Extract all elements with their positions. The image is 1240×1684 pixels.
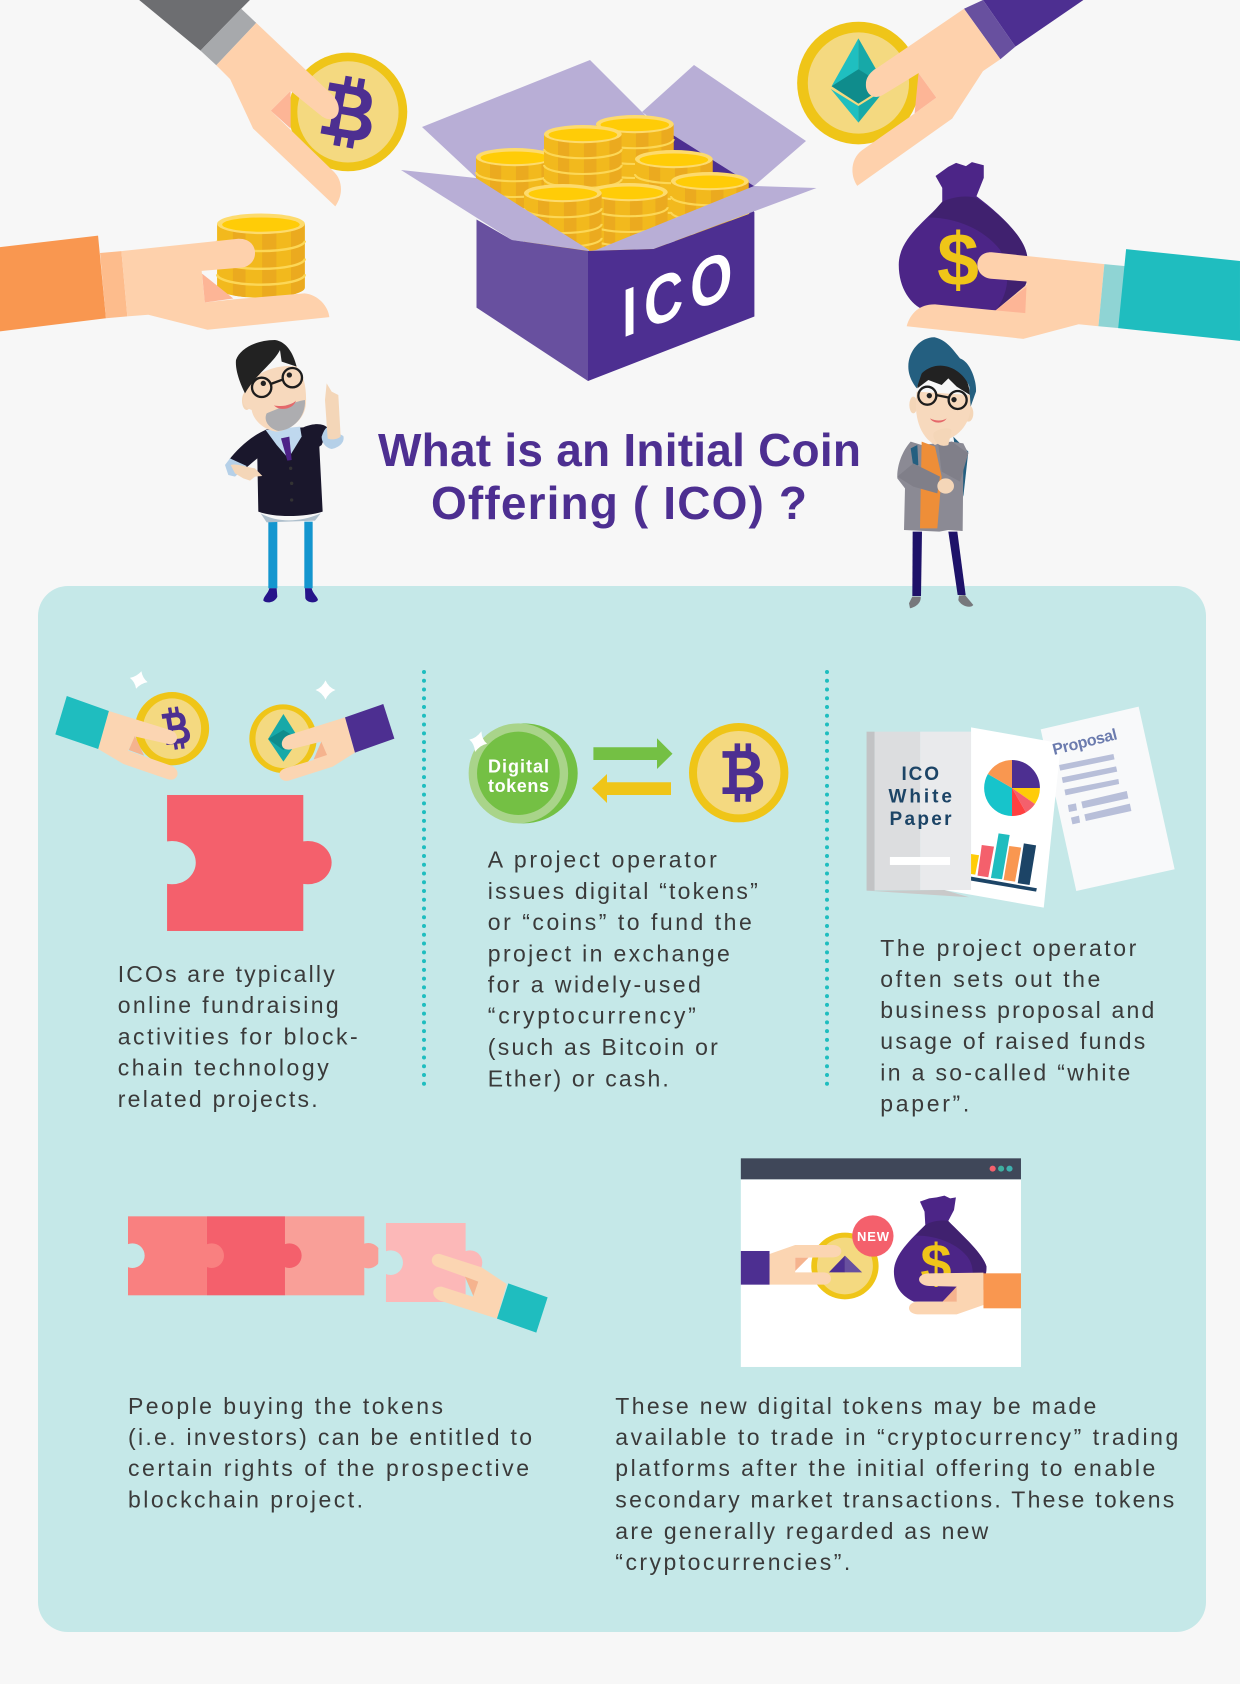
text: trading platforms paragraph: platforms after the initial offering to enable xyxy=(615,1455,1155,1481)
icon: trading platform window xyxy=(741,1158,1021,1367)
icon: white paper, charts and proposal: Paper xyxy=(890,809,952,830)
icon: digital token exchanged with bitcoin: tokens xyxy=(488,776,549,796)
text: column 3: business proposal and xyxy=(880,997,1154,1023)
icon: ICO box full of coins xyxy=(401,60,816,381)
text: column 3 xyxy=(880,935,1154,1117)
text: column 3: The project operator xyxy=(880,935,1137,961)
divider: left dotted line xyxy=(422,672,426,1085)
text: trading platforms paragraph: “cryptocurrencies”. xyxy=(615,1549,850,1575)
text: column 3: often sets out the xyxy=(880,966,1100,992)
icon: trading platform window: NEW xyxy=(857,1229,890,1244)
icon: hand holding coin stack xyxy=(0,214,329,331)
text: column 1 xyxy=(118,961,358,1112)
text: trading platforms paragraph: available to trade in “cryptocurrency” trading xyxy=(615,1424,1178,1450)
icon: trading platform window: $ xyxy=(920,1232,952,1295)
text: trading platforms paragraph: are generally regarded as new xyxy=(615,1518,989,1544)
text: investors paragraph xyxy=(128,1393,532,1512)
text: column 3: in a so-called “white xyxy=(880,1060,1130,1086)
text: column 1: activities for block- xyxy=(118,1023,358,1049)
icon: ICO box full of coins: ICO xyxy=(622,235,732,353)
icon: two hands with coins and sparkles xyxy=(55,669,394,781)
divider: right dotted line xyxy=(825,672,829,1085)
title xyxy=(378,424,861,529)
text: column 1: ICOs are typically xyxy=(118,961,335,987)
text: column 1: online fundraising xyxy=(118,992,339,1018)
text: investors paragraph: People buying the tokens xyxy=(128,1393,443,1419)
text: column 2: or “coins” to fund the xyxy=(488,909,752,935)
text: investors paragraph: certain rights of the prospective xyxy=(128,1455,529,1481)
icon: white paper, charts and proposal: White xyxy=(888,786,952,807)
text: column 1: chain technology xyxy=(118,1054,329,1080)
text: column 1: related projects. xyxy=(118,1086,318,1112)
text: column 3: usage of raised funds xyxy=(880,1028,1145,1054)
text: column 3: paper”. xyxy=(880,1091,969,1117)
icon: white paper, charts and proposal: Proposal xyxy=(1051,726,1119,759)
text: column 2: Ether) or cash. xyxy=(488,1065,669,1091)
icon: digital token exchanged with bitcoin xyxy=(466,723,788,823)
icon: hand holding money bag: $ xyxy=(937,217,979,301)
text: column 2: project in exchange xyxy=(488,940,730,966)
text: trading platforms paragraph xyxy=(615,1393,1178,1575)
icon: puzzle pieces joined by a hand xyxy=(117,1216,548,1333)
text: column 2: issues digital “tokens” xyxy=(488,878,758,904)
text: investors paragraph: (i.e. investors) can be entitled to xyxy=(128,1424,532,1450)
character: thinking young man with cap xyxy=(897,337,976,608)
text: investors paragraph: blockchain project. xyxy=(128,1486,363,1512)
text: trading platforms paragraph: These new digital tokens may be made xyxy=(615,1393,1096,1419)
icon: white paper, charts and proposal xyxy=(867,707,1175,908)
character: man in suit pointing up xyxy=(225,340,344,602)
title: Offering ( ICO) ? xyxy=(431,477,807,529)
icon: hand holding ether coin xyxy=(797,0,1083,186)
icon: red puzzle piece xyxy=(147,795,332,931)
text: column 2: A project operator xyxy=(488,847,717,873)
text: column 2: for a widely-used xyxy=(488,972,701,998)
icon: hand holding money bag xyxy=(899,162,1240,341)
text: column 2: “cryptocurrency” xyxy=(488,1003,696,1029)
icon: white paper, charts and proposal: ICO xyxy=(902,764,939,785)
text: column 2 xyxy=(488,847,758,1091)
icon: digital token exchanged with bitcoin: Digital xyxy=(488,756,549,776)
title: What is an Initial Coin xyxy=(378,424,861,476)
icon: hand holding bitcoin coin xyxy=(139,0,407,206)
text: column 2: (such as Bitcoin or xyxy=(488,1034,718,1060)
text: trading platforms paragraph: secondary market transactions. These tokens xyxy=(615,1486,1174,1512)
panel: main teal background xyxy=(38,586,1206,1632)
